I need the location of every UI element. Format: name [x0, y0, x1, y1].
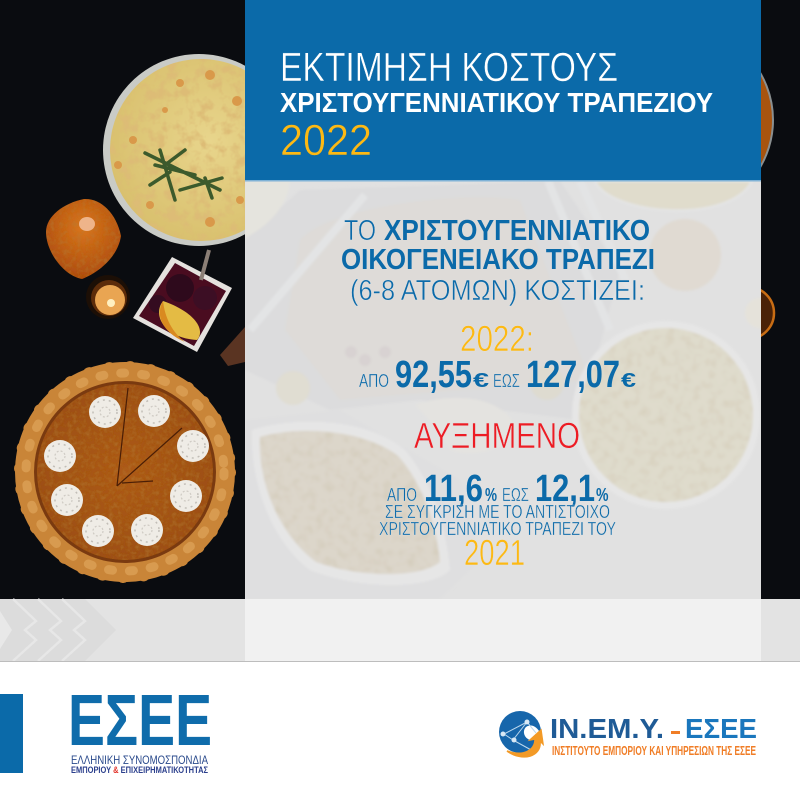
- title year: 2022: [280, 116, 372, 165]
- photo: food cut off on the right side: [761, 72, 776, 337]
- comparison text: [379, 502, 616, 539]
- panel: translucent content area with faded food: [245, 181, 775, 599]
- photo: food on the left side: [14, 54, 245, 583]
- increase label: ΑΥΞΗΜΕΝΟ: [414, 415, 580, 456]
- percentage range: ΑΠΟ: [387, 485, 417, 505]
- comparison text: ΣΕ ΣΥΓΚΡΙΣΗ ΜΕ ΤΟ ΑΝΤΙΣΤΟΙΧΟ: [385, 502, 610, 522]
- year 2022 label: 2022:: [460, 318, 534, 359]
- percentage range: [387, 468, 608, 510]
- footer accent bar: [0, 694, 23, 773]
- text block: table description: (6-8 ΑΤΟΜΩΝ) ΚΟΣΤΙΖΕΙ:: [350, 275, 645, 307]
- title line 1: ΕΚΤΙΜΗΣΗ ΚΟΣΤΟΥΣ: [280, 44, 618, 90]
- price range: [359, 354, 636, 396]
- comparison text: ΧΡΙΣΤΟΥΓΕΝΝΙΑΤΙΚΟ ΤΡΑΠΕΖΙ ΤΟΥ: [379, 519, 616, 539]
- percentage range: 12,1: [535, 468, 595, 510]
- bread roll: [46, 199, 121, 279]
- logo: ESEE: [68, 681, 212, 776]
- logo: ESEE: ΕΣΕΕ: [68, 681, 212, 761]
- pumpkin pie: [19, 366, 231, 578]
- year 2021 label: 2021: [464, 532, 525, 573]
- bottom band: grey strip with chevrons: [0, 599, 800, 661]
- price range: ΕΩΣ: [493, 371, 520, 391]
- percentage range: %: [596, 485, 608, 505]
- logo: ESEE: ΕΜΠΟΡΙΟΥ & ΕΠΙΧΕΙΡΗΜΑΤΙΚΟΤΗΤΑΣ: [71, 765, 208, 776]
- price range: 92,55: [395, 354, 472, 396]
- gratin dish: [103, 54, 245, 246]
- percentage range: %: [485, 485, 497, 505]
- percentage range: 11,6: [424, 468, 483, 510]
- header panel: [245, 0, 761, 182]
- logo: IN.EM.Y. wordmark: [550, 713, 757, 758]
- price range: ΑΠΟ: [359, 371, 389, 391]
- candle: [86, 275, 130, 319]
- text block: table description: ΟΙΚΟΓΕΝΕΙΑΚΟ ΤΡΑΠΕΖΙ: [341, 244, 655, 276]
- whipped cream dollops: [44, 395, 209, 547]
- percentage range: ΕΩΣ: [502, 485, 529, 505]
- price range: €: [473, 370, 489, 392]
- logo: IN.EM.Y. globe icon: [499, 711, 543, 757]
- logo: IN.EM.Y. wordmark: ΕΣΕΕ: [685, 713, 757, 744]
- logo: IN.EM.Y. wordmark: ΙΝ.ΕΜ.Υ.: [550, 713, 664, 744]
- white footer: [0, 661, 800, 800]
- text block: table description: ΧΡΙΣΤΟΥΓΕΝΝΙΑΤΙΚΟ: [384, 215, 650, 247]
- title line 2: ΧΡΙΣΤΟΥΓΕΝΝΙΑΤΙΚΟΥ ΤΡΑΠΕΖΙΟΥ: [280, 87, 713, 118]
- price range: 127,07: [526, 354, 620, 396]
- knife handle: [220, 327, 245, 366]
- price range: €: [621, 370, 636, 392]
- text block: table description: [341, 215, 655, 307]
- text block: table description: ΤΟ: [344, 215, 376, 247]
- photo: dark table background: [0, 0, 800, 599]
- logo: ESEE: ΕΛΛΗΝΙΚΗ ΣΥΝΟΜΟΣΠΟΝΔΙΑ: [71, 753, 208, 767]
- panel bottom extension: lighter strip: [245, 599, 761, 661]
- cranberry dish: [133, 250, 232, 352]
